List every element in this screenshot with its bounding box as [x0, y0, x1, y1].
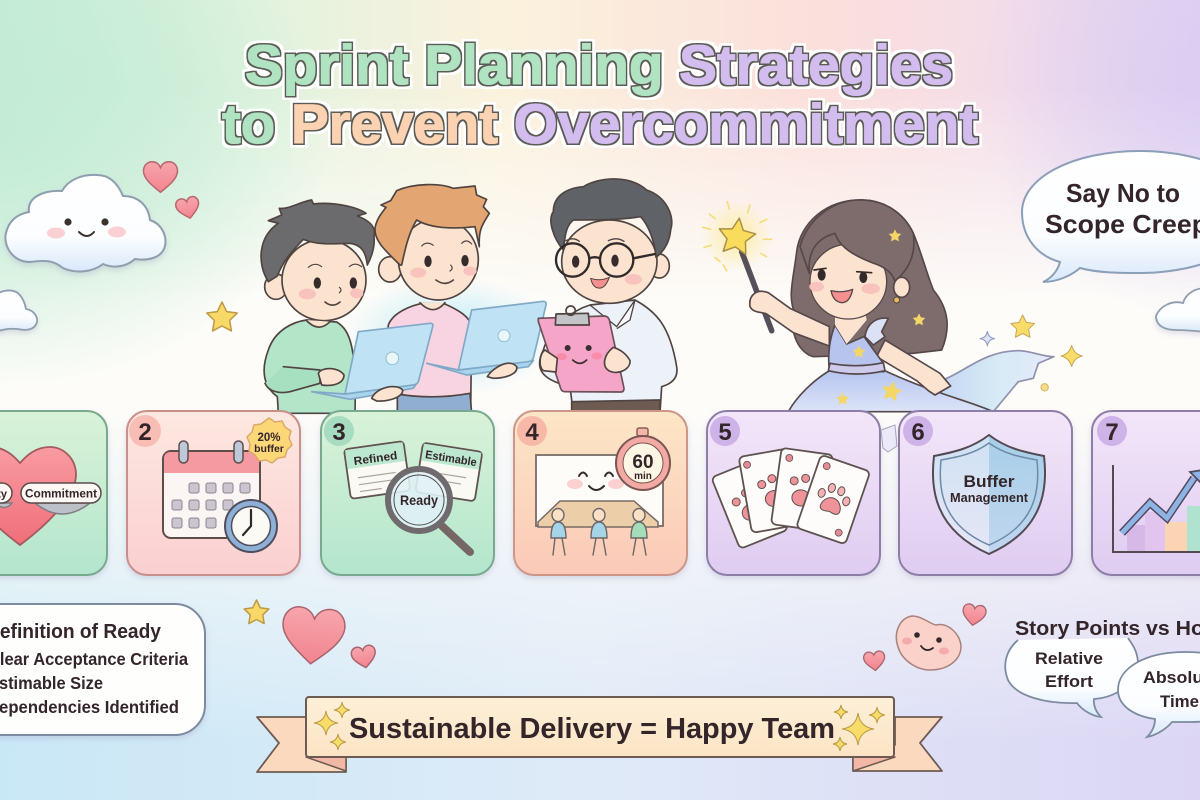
sleeve: [865, 318, 888, 345]
laptop glow: [343, 277, 557, 397]
card 3: definition of ready cards: Estimable: [424, 449, 477, 469]
card 6: buffer management shield: 6: [911, 419, 925, 446]
skirt: [788, 370, 993, 412]
icon: smiling cloud: [5, 175, 165, 271]
character: man with glasses: [540, 179, 677, 413]
title: Sprint Planning Strategies: [245, 33, 953, 96]
card 2: calendar with buffer: [127, 411, 300, 575]
icon: hearts near cloud: [144, 162, 201, 221]
bangs: [800, 200, 914, 282]
neck and face: [835, 312, 867, 344]
banner: Sustainable Delivery = Happy Team: [257, 697, 942, 772]
bubble: absolute time: [1118, 652, 1200, 737]
title: to Prevent Overcommitment: [222, 92, 978, 155]
dress and hair stars: [889, 229, 901, 241]
laptop: right: [427, 301, 546, 378]
card 1: capacity commitment: Commitment: [25, 488, 97, 500]
icon: smiling blob with hearts: [863, 603, 987, 671]
hair back: [791, 200, 947, 357]
belt: [828, 363, 885, 374]
card 5: planning poker paw cards: [707, 411, 880, 575]
bubble: relative effort: [1005, 638, 1138, 717]
title: [222, 33, 978, 155]
sparkle stars by cape: [1011, 315, 1034, 337]
ribbon folds: [306, 757, 895, 771]
banner text: Sustainable Delivery = Happy Team: [349, 713, 835, 745]
wand rays: [703, 202, 772, 271]
card 6: buffer management shield: Management: [950, 491, 1029, 505]
card 3: definition of ready cards: 3: [332, 419, 346, 446]
icon: star and hearts bottom left: [244, 600, 378, 670]
card 4: sixty-minute meeting: 4: [525, 419, 539, 446]
panel: story points versus hours: [1005, 618, 1200, 737]
bodice: [829, 325, 884, 372]
card 6: buffer management shield: Buffer: [964, 472, 1015, 491]
character: girl with magic wand: [702, 200, 1082, 412]
icon: small cloud right: [1156, 288, 1200, 332]
panel: definition of ready checklist: [0, 604, 205, 735]
card 1: capacity commitment: [0, 411, 107, 575]
card 3: definition of ready cards: Ready: [400, 492, 438, 508]
panel: story points versus hours: Relative: [1035, 649, 1103, 668]
raised arm: [750, 291, 829, 346]
speech bubble: Say No to Scope Creep: Say No to: [1066, 178, 1180, 208]
laptop: left: [312, 323, 433, 401]
card 3: definition of ready cards: [321, 411, 494, 575]
icon: small cloud left: [0, 290, 37, 332]
wand glow: [702, 202, 772, 272]
card 2: calendar with buffer: 20%: [257, 432, 281, 444]
speech bubble: Say No to Scope Creep: [1022, 151, 1200, 282]
speech bubble: Say No to Scope Creep: Scope Creep: [1045, 209, 1200, 239]
clipboard: [538, 306, 630, 392]
characters: three team members with laptops and clipboard: [261, 179, 677, 413]
character: boy with orange hair: [375, 185, 489, 413]
card 5: planning poker paw cards: 5: [718, 419, 732, 446]
panel: story points versus hours: Effort: [1045, 672, 1093, 691]
dress hem between cards: [881, 425, 897, 452]
card 4: sixty-minute meeting: 60: [632, 452, 654, 473]
card 2: calendar with buffer: 2: [138, 419, 152, 446]
cape: [913, 351, 1054, 412]
card 6: buffer management shield: [899, 411, 1072, 575]
banner sparkles: [314, 702, 885, 751]
wand: [742, 252, 772, 331]
card 3: definition of ready cards: Refined: [353, 450, 398, 468]
step cards row: [0, 411, 1200, 575]
wand star: [716, 216, 758, 255]
card 4: sixty-minute meeting: min: [634, 471, 652, 482]
extended arm: [877, 340, 951, 395]
icon: star left: [207, 302, 237, 331]
character: boy with green sweater: [261, 200, 374, 413]
card 7: velocity chart: [1092, 411, 1200, 575]
right ribbon tail: [853, 717, 942, 771]
left ribbon tail: [257, 717, 346, 772]
panel: story points versus hours: Time: [1160, 692, 1199, 711]
card 2: calendar with buffer: buffer: [254, 443, 284, 455]
ribbon body: [306, 697, 894, 757]
card 7: velocity chart: 7: [1105, 419, 1119, 446]
card 4: sixty-minute meeting: [514, 411, 687, 575]
